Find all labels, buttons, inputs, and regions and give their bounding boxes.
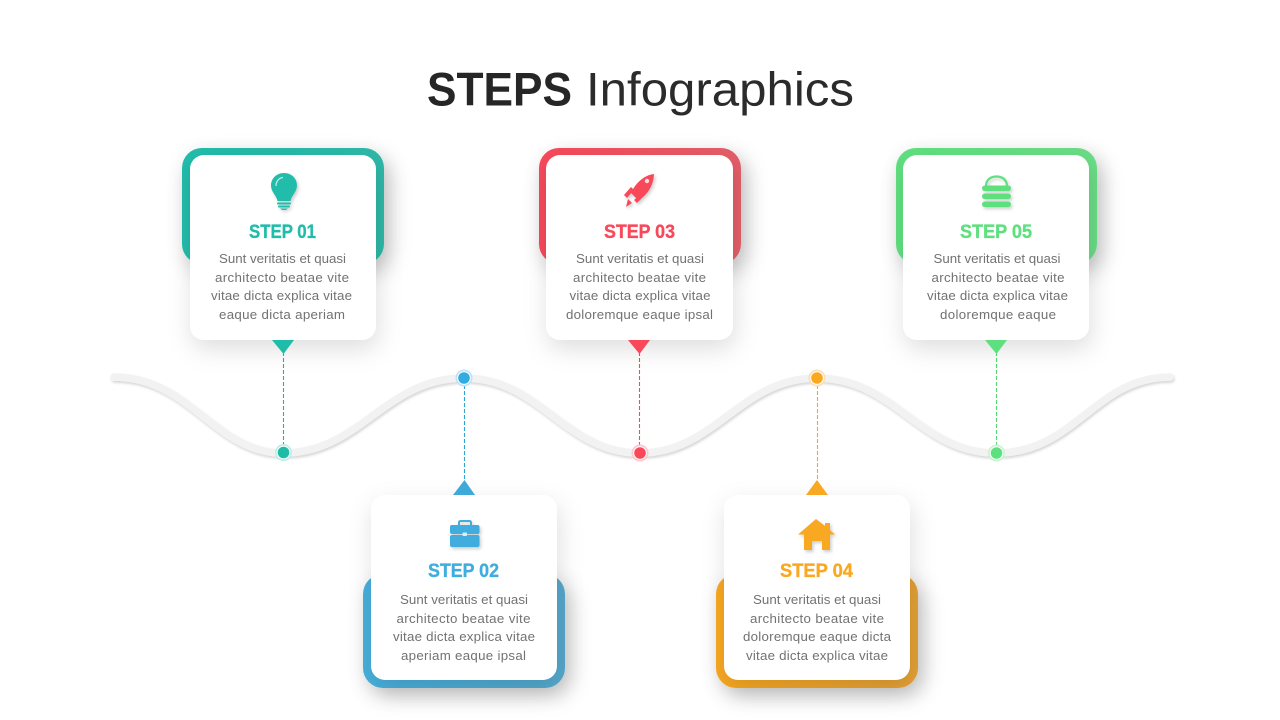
step 05 connector: [988, 352, 1005, 462]
step 02 colour frame: [363, 574, 565, 688]
step 03 body text: doloremque eaque ipsal: [566, 307, 713, 322]
step 03 pointer: [628, 340, 650, 354]
icon: briefcase: [450, 521, 480, 547]
panel: step 02: [363, 480, 565, 688]
step 05 body text: [927, 251, 1068, 322]
step 05 colour frame: [896, 148, 1097, 264]
step 04 connector: [808, 370, 826, 482]
step 04 body text: doloremque eaque dicta: [743, 629, 892, 644]
step 05 white card: [903, 155, 1089, 340]
step 05 body text: Sunt veritatis et quasi: [934, 251, 1061, 266]
step 02 connector: [456, 370, 472, 482]
step 03 white card: [546, 155, 733, 340]
step 03 body text: Sunt veritatis et quasi: [576, 251, 704, 266]
icon: rocket: [624, 174, 654, 207]
step 01 body text: vitae dicta explica vitae: [211, 288, 352, 303]
step 02 pointer: [453, 480, 475, 495]
step 03 colour frame: [539, 148, 741, 264]
step 01 pointer: [272, 340, 294, 354]
icon: house: [798, 519, 835, 550]
step 02 heading: STEP 02: [428, 560, 499, 582]
step 04 pointer: [806, 480, 828, 495]
step 03 body text: architecto beatae vite: [573, 270, 706, 285]
step 04 heading: STEP 04: [780, 560, 853, 582]
icon: light bulb: [271, 173, 297, 210]
step 01 body text: Sunt veritatis et quasi: [219, 251, 346, 266]
step 01 body text: eaque dicta aperiam: [219, 307, 345, 322]
panel: step 03: [539, 148, 741, 354]
step 04 colour frame: [716, 574, 918, 688]
step 02 body text: vitae dicta explica vitae: [393, 629, 535, 644]
panel: step 05: [896, 148, 1097, 354]
wave timeline: [114, 377, 1170, 453]
step 05 body text: vitae dicta explica vitae: [927, 288, 1068, 303]
step 02 body text: architecto beatae vite: [396, 611, 530, 626]
panel: step 04: [716, 480, 918, 688]
step 02 body text: Sunt veritatis et quasi: [400, 592, 528, 607]
step 01 heading: STEP 01: [249, 221, 316, 243]
step 04 body text: architecto beatae vite: [750, 611, 884, 626]
step 01 body text: architecto beatae vite: [215, 270, 349, 285]
step 05 body text: doloremque eaque: [940, 307, 1056, 322]
step 05 heading: STEP 05: [960, 221, 1032, 243]
step 04 body text: vitae dicta explica vitae: [746, 648, 888, 663]
step 04 body text: [743, 592, 892, 663]
title: [427, 62, 854, 116]
step 03 body text: vitae dicta explica vitae: [570, 288, 710, 303]
step 02 body text: aperiam eaque ipsal: [401, 648, 526, 663]
step 03 body text: [566, 251, 713, 322]
title: STEPS: [427, 62, 572, 116]
step 05 pointer: [985, 340, 1007, 354]
icon: padlock: [982, 176, 1011, 207]
panel: step 01: [182, 148, 384, 354]
step 04 body text: Sunt veritatis et quasi: [753, 592, 881, 607]
step 05 body text: architecto beatae vite: [932, 270, 1064, 285]
step 03 connector: [632, 352, 648, 462]
title: Infographics: [586, 62, 854, 116]
step 03 heading: STEP 03: [604, 221, 675, 243]
step 01 colour frame: [182, 148, 384, 264]
step 01 connector: [275, 352, 292, 461]
step 02 white card: [371, 495, 557, 680]
step 01 body text: [211, 251, 352, 322]
step 04 white card: [724, 495, 910, 680]
step 01 white card: [190, 155, 376, 340]
step 02 body text: [393, 592, 535, 663]
